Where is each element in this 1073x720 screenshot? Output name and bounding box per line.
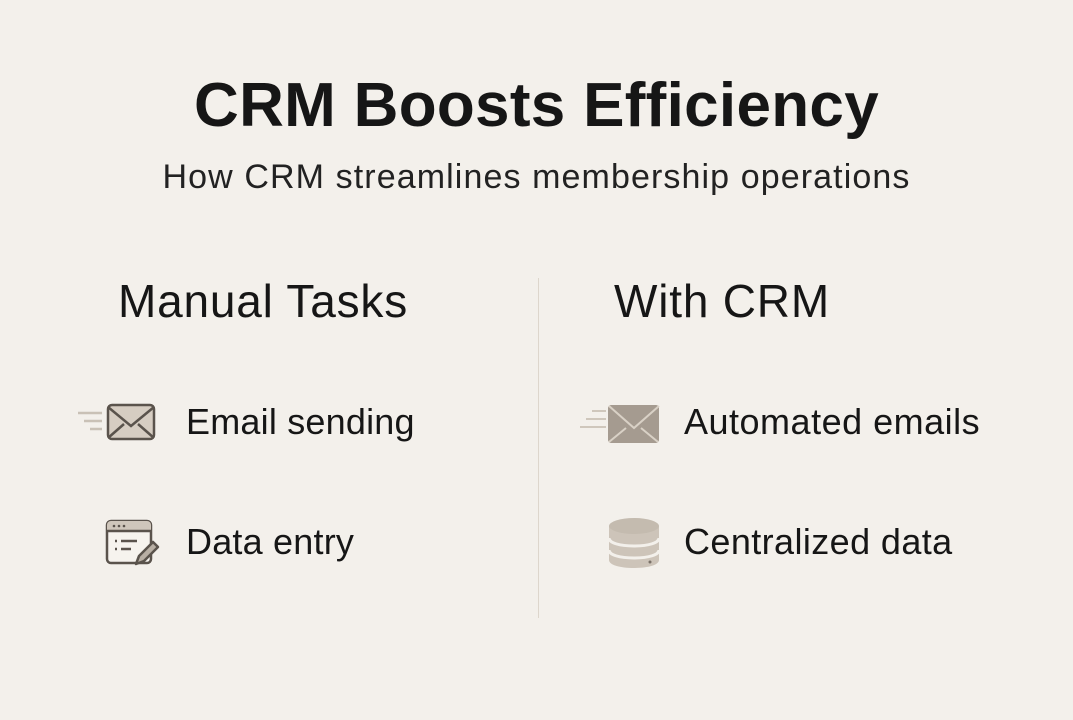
title: CRM Boosts Efficiency (194, 71, 879, 140)
heading: manual tasks: Manual Tasks (118, 275, 408, 327)
text: email sending: Email sending (186, 401, 415, 442)
icon: data entry (106, 520, 160, 566)
text: centralized data: Centralized data (684, 521, 953, 562)
icon: envelope manual (78, 404, 156, 440)
subtitle: How CRM streamlines membership operations (162, 158, 910, 196)
text: automated emails: Automated emails (684, 401, 980, 442)
heading: with CRM: With CRM (614, 275, 830, 327)
text: data entry: Data entry (186, 521, 354, 562)
icon: envelope automated (580, 405, 660, 443)
icon: database (609, 518, 659, 568)
